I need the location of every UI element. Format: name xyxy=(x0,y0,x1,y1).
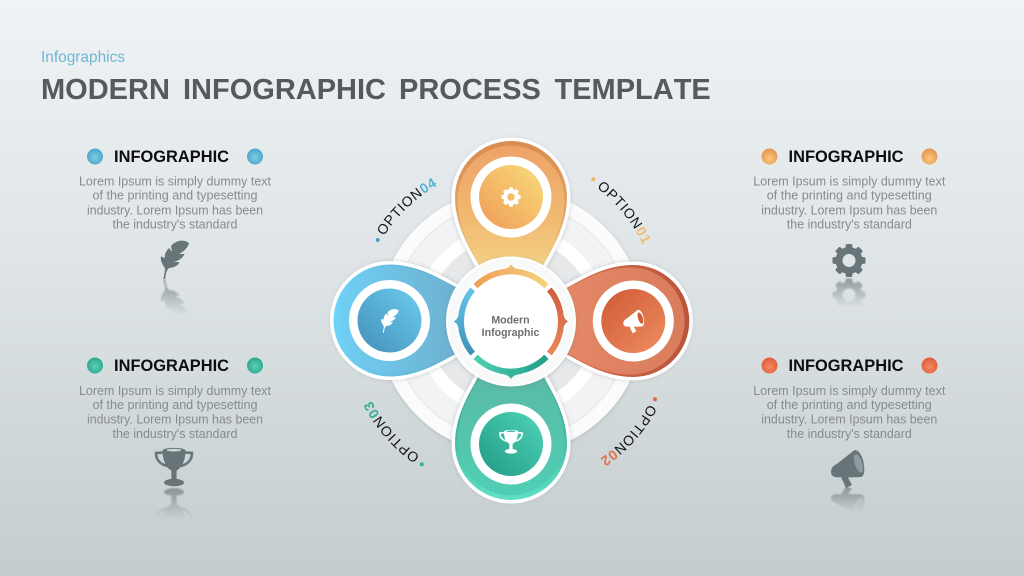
body text: of the printing and typesetting xyxy=(767,397,932,412)
arc and arrow: orange xyxy=(476,264,546,286)
option label: OPTION 03: OPTION03 xyxy=(364,402,418,462)
option label: OPTION 01: OPTION01 xyxy=(598,182,650,244)
pin: option 04 blue xyxy=(334,264,464,376)
center label: Modern xyxy=(491,314,530,326)
icon: grey feather with reflection xyxy=(161,241,189,317)
icon: grey megaphone with reflection xyxy=(831,450,865,513)
bullet: teal left xyxy=(87,358,103,374)
title: INFOGRAPHIC xyxy=(183,74,386,106)
panel: bottom left teal text block xyxy=(79,357,271,527)
body text xyxy=(753,383,946,441)
bullet: red right xyxy=(922,358,938,374)
heading: INFOGRAPHIC xyxy=(788,148,904,166)
body text xyxy=(79,174,271,232)
arc and arrow: blue xyxy=(454,289,473,354)
body text xyxy=(79,383,271,441)
concentric background rings xyxy=(378,188,644,454)
bullet: red left xyxy=(762,358,778,374)
icon: grey trophy with reflection xyxy=(156,448,192,527)
body text: the industry's standard xyxy=(112,426,238,441)
heading: INFOGRAPHIC xyxy=(788,357,904,375)
icon: white feather xyxy=(381,309,399,333)
center label: Infographic xyxy=(482,327,539,339)
body text: Lorem Ipsum is simply dummy text xyxy=(753,383,946,398)
arc and arrow: teal xyxy=(476,357,546,379)
icon: grey gear with reflection xyxy=(832,244,866,312)
bullet: blue right xyxy=(247,148,263,164)
body text: Lorem Ipsum is simply dummy text xyxy=(79,383,271,398)
body text: of the printing and typesetting xyxy=(767,188,932,203)
heading: INFOGRAPHIC xyxy=(114,357,229,375)
body text: the industry's standard xyxy=(787,217,912,232)
title: TEMPLATE xyxy=(554,74,711,106)
body text: industry. Lorem Ipsum has been xyxy=(761,202,937,217)
title: PROCESS xyxy=(399,74,541,106)
bullet: orange right xyxy=(922,148,938,164)
title: MODERN xyxy=(41,74,170,106)
panel: bottom right red text block xyxy=(753,357,946,513)
option label: OPTION 02: OPTION02 xyxy=(600,406,656,466)
icon: white megaphone xyxy=(623,310,644,333)
panel: top right orange text block xyxy=(753,148,946,312)
body text: Lorem Ipsum is simply dummy text xyxy=(753,174,946,188)
arc and arrow: red xyxy=(549,289,568,354)
body text: of the printing and typesetting xyxy=(92,188,258,203)
center hub xyxy=(446,256,576,386)
pin: option 03 teal xyxy=(455,369,567,500)
body text: the industry's standard xyxy=(112,217,238,232)
body text: of the printing and typesetting xyxy=(92,397,258,412)
bullet: teal right xyxy=(247,358,263,374)
bullet: orange left xyxy=(762,148,778,164)
eyebrow label: Infographics xyxy=(41,49,125,66)
pin: option 01 orange xyxy=(455,141,567,272)
icon: white gear xyxy=(501,187,521,207)
body text xyxy=(753,174,946,232)
body text: industry. Lorem Ipsum has been xyxy=(761,412,937,427)
title xyxy=(41,74,711,106)
center label xyxy=(482,314,539,339)
body text: industry. Lorem Ipsum has been xyxy=(87,412,263,427)
icon: white trophy xyxy=(500,430,522,454)
bullet: blue left xyxy=(87,148,103,164)
body text: Lorem Ipsum is simply dummy text xyxy=(79,174,271,188)
body text: industry. Lorem Ipsum has been xyxy=(87,202,263,217)
heading: INFOGRAPHIC xyxy=(114,148,229,166)
pin: option 02 red xyxy=(559,265,689,377)
body text: the industry's standard xyxy=(787,426,912,441)
option label: OPTION 04: OPTION04 xyxy=(378,178,436,234)
panel: top left blue text block xyxy=(79,148,271,317)
